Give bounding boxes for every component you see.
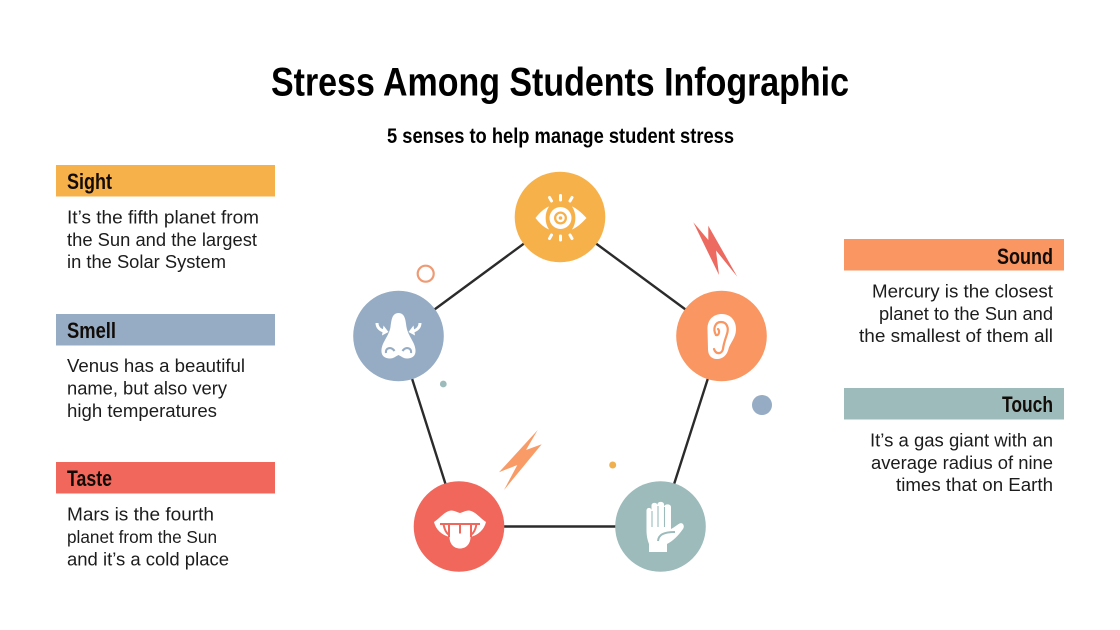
panel: sound — [844, 239, 1064, 346]
icon: eye — [536, 196, 586, 240]
node: nose — [353, 291, 444, 381]
panel: touch — [844, 388, 1064, 495]
panel: sight: It’s the fifth planet from — [67, 208, 259, 228]
panel: sound: planet to the Sun and — [879, 304, 1053, 324]
icon: hand — [646, 502, 684, 552]
decoration: red lightning bolt — [693, 222, 737, 277]
panel: taste: planet from the Sun — [67, 527, 217, 547]
node: hand — [615, 481, 706, 572]
panel: smell: name, but also very — [67, 378, 227, 398]
node: tongue — [414, 481, 504, 572]
panel: sight — [56, 165, 275, 272]
panel: sound: Sound — [997, 244, 1053, 269]
panel: sound: Mercury is the closest — [872, 282, 1053, 302]
panel: sight: in the Solar System — [67, 252, 226, 272]
decoration: orange lightning bolt — [499, 430, 542, 490]
panel: sound: the smallest of them all — [859, 326, 1053, 346]
panel: taste: Taste — [67, 466, 112, 491]
panel: smell: high temperatures — [67, 401, 217, 421]
decoration: small teal dot — [440, 381, 447, 387]
panel: taste: Mars is the fourth — [67, 504, 214, 524]
node: eye — [515, 172, 605, 262]
panel: taste: and it’s a cold place — [67, 550, 229, 570]
panel: touch: Touch — [1002, 392, 1053, 417]
icon: ear — [707, 314, 736, 359]
node: ear — [676, 291, 767, 381]
icon: mouth with tongue — [434, 510, 486, 548]
subtitle: 5 senses to help manage student stress — [387, 124, 734, 148]
panel: smell — [56, 314, 275, 421]
panel: touch: It’s a gas giant with an — [870, 430, 1053, 450]
panel: sight: Sight — [67, 169, 113, 194]
title: Stress Among Students Infographic — [271, 60, 849, 104]
icon: nose — [377, 313, 420, 358]
panel: touch: average radius of nine — [871, 453, 1053, 473]
decoration: ring — [418, 266, 434, 282]
decoration: blue dot — [752, 395, 772, 415]
panel: touch: times that on Earth — [896, 475, 1053, 495]
panel: sight: the Sun and the largest — [67, 230, 257, 250]
decoration: yellow dot — [609, 462, 616, 468]
panel: taste — [56, 462, 275, 570]
panel: smell: Smell — [67, 318, 116, 343]
pentagon connector lines — [398, 217, 722, 526]
panel: smell: Venus has a beautiful — [67, 356, 245, 376]
